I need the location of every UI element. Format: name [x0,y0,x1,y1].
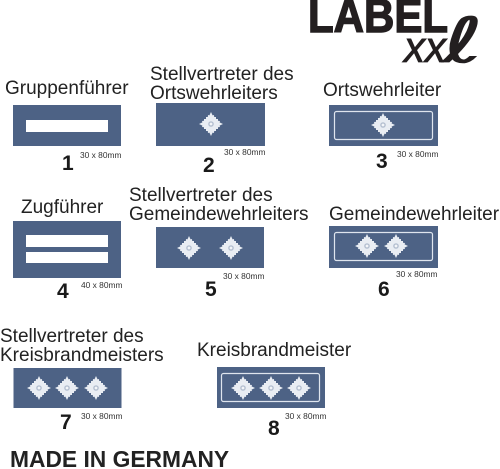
size 4: 40 x 80mm [81,280,122,290]
heading 7: Kreisbrandmeisters [0,345,164,366]
badge 3 [329,105,438,146]
heading 7: Stellvertreter des [0,326,144,347]
badge 1 [13,105,121,146]
heading 5: Gemeindewehrleiters [129,204,309,225]
badge 8 [217,367,325,408]
size 7: 30 x 80mm [81,411,122,421]
heading 5: Stellvertreter des [129,185,273,206]
size 3: 30 x 80mm [397,149,438,159]
heading 2: Stellvertreter des [150,64,294,85]
badge 6 [329,226,438,268]
number 3: 3 [376,150,388,173]
size 1: 30 x 80mm [80,150,121,160]
number 2: 2 [203,154,215,177]
heading 7 [0,326,164,366]
heading 2: Ortswehrleiters [150,83,278,104]
logo: ℓ [441,4,483,77]
number 1: 1 [62,152,74,175]
number 4: 4 [57,280,69,303]
badge 5 [156,227,264,268]
heading 3: Ortswehrleiter [323,80,441,101]
logo: xx [402,23,448,72]
size 5: 30 x 80mm [223,271,264,281]
size 6: 30 x 80mm [396,269,437,279]
heading 8: Kreisbrandmeister [197,340,351,361]
size 8: 30 x 80mm [285,411,326,421]
heading 1: Gruppenführer [5,78,129,99]
heading 5 [129,185,309,225]
heading 4: Zugführer [21,197,103,218]
number 8: 8 [268,417,280,440]
number 5: 5 [205,278,217,301]
badge 7 [14,368,122,408]
size 2: 30 x 80mm [224,147,265,157]
badge 4 [13,221,121,278]
number 6: 6 [378,278,390,301]
heading 2 [150,64,294,104]
logo [308,0,483,77]
badge 2 [156,103,265,146]
heading 6: Gemeindewehrleiter [329,204,499,225]
number 7: 7 [60,411,72,434]
